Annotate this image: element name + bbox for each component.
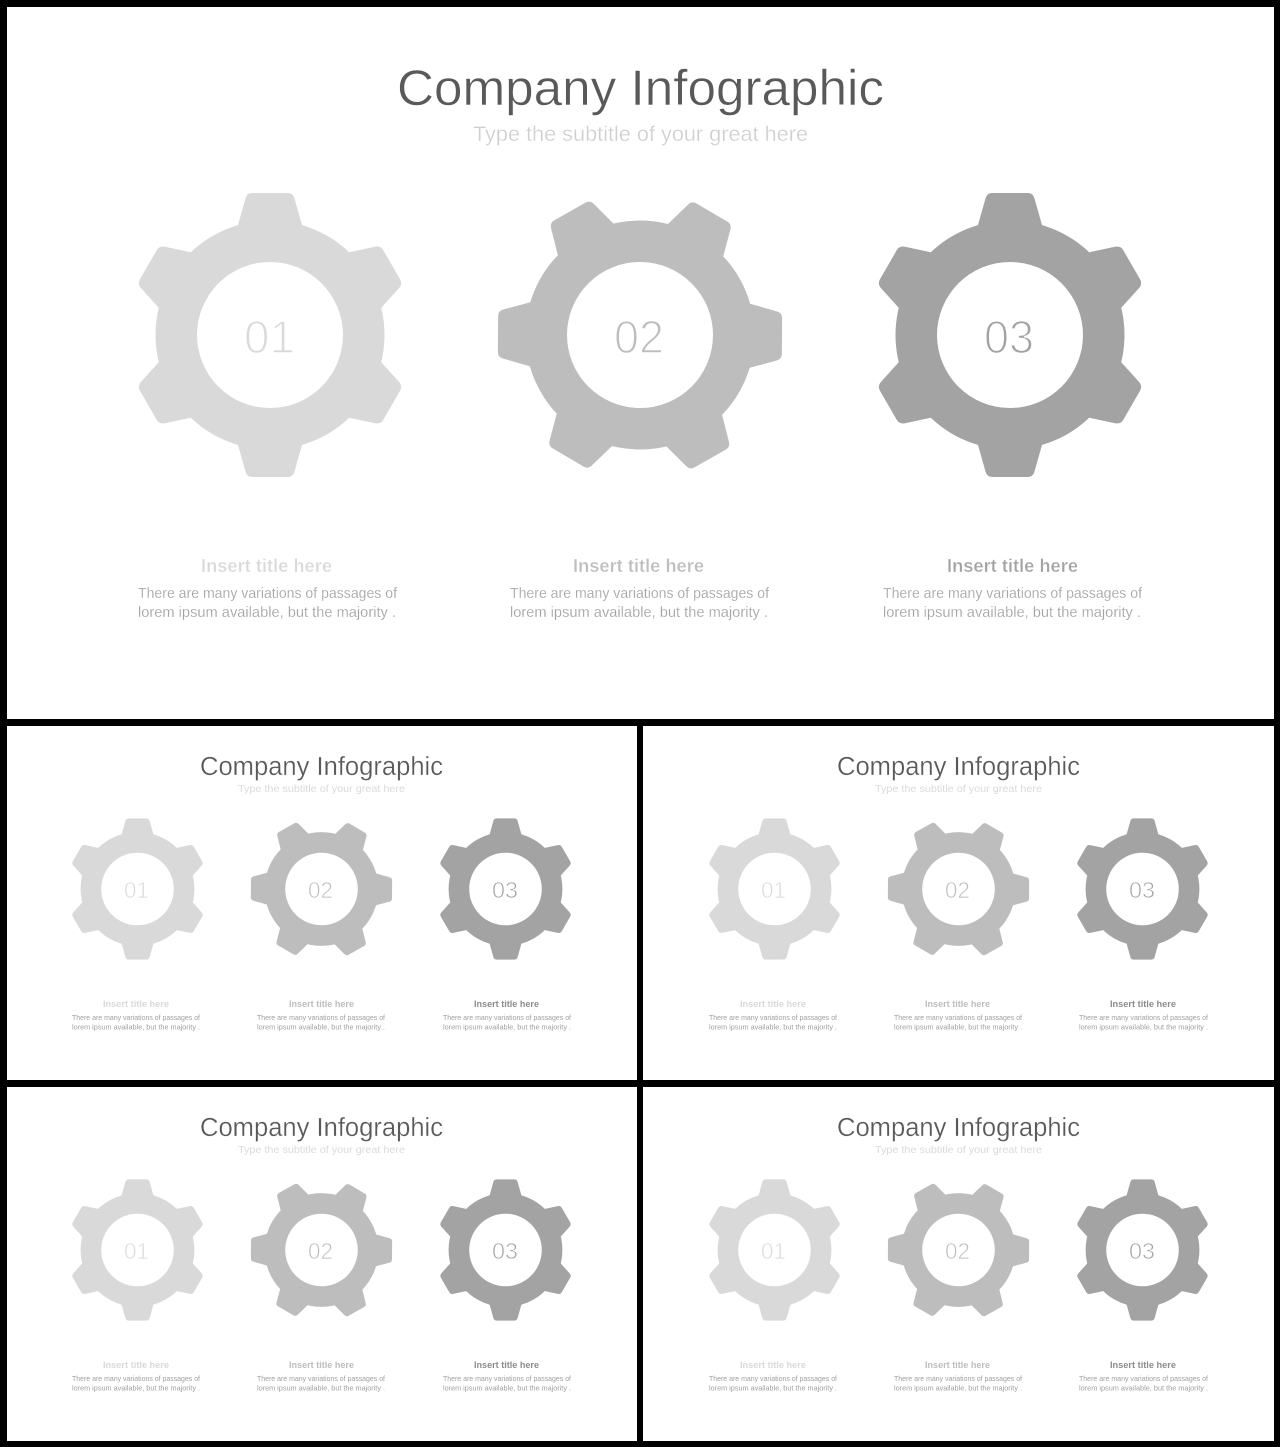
text block: column 2: Insert title here — [925, 999, 990, 1009]
text block: column 3 — [1079, 999, 1208, 1032]
icon: gear 01: 01 — [761, 1238, 786, 1264]
text block: column 1 — [709, 999, 837, 1032]
icon: gear 02: 02 — [945, 1238, 970, 1264]
icon: gear 01: 01 — [244, 311, 295, 363]
text block: column 3 — [883, 556, 1143, 621]
text block: column 3: There are many variations of passages of — [1079, 1374, 1208, 1383]
icon: gear 03 — [1074, 818, 1211, 960]
text block: column 3: lorem ipsum available, but the majority . — [883, 605, 1141, 621]
text block: column 2: There are many variations of passages of — [894, 1013, 1022, 1022]
icon: gear 03: 03 — [1129, 877, 1155, 903]
text block: column 2: Insert title here — [289, 1360, 354, 1370]
text block: column 3 — [1079, 1360, 1208, 1392]
text block: column 1: Insert title here — [201, 556, 332, 576]
icon: gear 02: 02 — [945, 877, 970, 903]
text block: column 1: There are many variations of passages of — [72, 1374, 200, 1383]
text block: column 3: Insert title here — [1110, 999, 1176, 1009]
icon: gear 03: 03 — [984, 311, 1034, 363]
text block: column 1 — [709, 1360, 837, 1392]
panel: small slide bottom left — [7, 1087, 637, 1441]
icon: gear 03 — [437, 818, 574, 960]
text block: column 2: There are many variations of passages of — [894, 1374, 1022, 1383]
text block: column 3: lorem ipsum available, but the majority . — [443, 1022, 571, 1032]
icon: gear 02: 02 — [308, 877, 333, 903]
icon: gear 02: 02 — [308, 1238, 333, 1264]
icon: gear 01 — [706, 1179, 843, 1321]
text block: column 2 — [894, 999, 1022, 1032]
text block: column 1: lorem ipsum available, but the majority . — [138, 605, 396, 621]
text block: column 3: Insert title here — [474, 999, 539, 1009]
title: Company Infographic — [200, 1114, 443, 1142]
panel: large slide — [7, 7, 1274, 719]
text block: column 2: lorem ipsum available, but the majority . — [894, 1384, 1022, 1392]
text block: column 2: lorem ipsum available, but the majority . — [257, 1022, 385, 1032]
text block: column 1: There are many variations of passages of — [72, 1013, 200, 1022]
icon: gear 03: 03 — [492, 1238, 518, 1264]
subtitle: Type the subtitle of your great here — [473, 123, 808, 146]
text block: column 1: lorem ipsum available, but the majority . — [709, 1022, 837, 1032]
title: Company Infographic — [837, 1114, 1080, 1142]
text block: column 1 — [138, 556, 398, 621]
title: Company Infographic — [397, 60, 884, 116]
panel: small slide top right — [643, 726, 1274, 1080]
icon: gear 03: 03 — [1129, 1238, 1155, 1264]
text block: column 1: Insert title here — [740, 1360, 806, 1370]
icon: gear 03 — [871, 193, 1149, 477]
text block: column 2: There are many variations of passages of — [510, 586, 770, 602]
icon: gear 02 — [250, 1180, 393, 1320]
subtitle: Type the subtitle of your great here — [875, 1144, 1042, 1156]
text block: column 2: Insert title here — [573, 556, 704, 576]
text block: column 3: Insert title here — [947, 556, 1078, 576]
text block: column 2: lorem ipsum available, but the majority . — [257, 1384, 385, 1392]
text block: column 2 — [510, 556, 770, 621]
text block: column 1: Insert title here — [740, 999, 806, 1009]
text block: column 1 — [72, 999, 200, 1032]
text block: column 3 — [443, 1360, 571, 1392]
icon: gear 02 — [250, 819, 393, 959]
text block: column 3: lorem ipsum available, but the majority . — [1079, 1022, 1208, 1032]
text block: column 2: There are many variations of passages of — [257, 1374, 385, 1383]
text block: column 3: There are many variations of passages of — [443, 1374, 571, 1383]
panel: small slide top left — [7, 726, 637, 1080]
text block: column 1: Insert title here — [103, 1360, 169, 1370]
icon: gear 01 — [131, 193, 409, 477]
text block: column 3: Insert title here — [474, 1360, 539, 1370]
text block: column 3: lorem ipsum available, but the majority . — [443, 1384, 571, 1392]
text block: column 1: lorem ipsum available, but the majority . — [72, 1022, 200, 1032]
text block: column 1: Insert title here — [103, 999, 169, 1009]
text block: column 2: lorem ipsum available, but the majority . — [894, 1022, 1022, 1032]
text block: column 2: Insert title here — [289, 999, 354, 1009]
text block: column 2 — [257, 1360, 385, 1392]
text block: column 3: There are many variations of passages of — [883, 586, 1143, 602]
text block: column 1: lorem ipsum available, but the majority . — [72, 1384, 200, 1392]
title: Company Infographic — [200, 753, 443, 781]
text block: column 2 — [894, 1360, 1022, 1392]
icon: gear 01 — [706, 818, 843, 960]
text block: column 1: There are many variations of passages of — [138, 586, 398, 602]
panel: small slide bottom right — [643, 1087, 1274, 1441]
icon: gear 03 — [1074, 1179, 1211, 1321]
text block: column 1: There are many variations of passages of — [709, 1013, 837, 1022]
icon: gear 01 — [69, 1179, 206, 1321]
subtitle: Type the subtitle of your great here — [238, 1144, 405, 1156]
text block: column 1: There are many variations of passages of — [709, 1374, 837, 1383]
text block: column 2: lorem ipsum available, but the majority . — [510, 605, 768, 621]
icon: gear 02 — [497, 194, 783, 476]
text block: column 2 — [257, 999, 385, 1032]
icon: gear 01: 01 — [124, 877, 149, 903]
text block: column 3 — [443, 999, 571, 1032]
icon: gear 01: 01 — [761, 877, 786, 903]
text block: column 3: There are many variations of passages of — [1079, 1013, 1208, 1022]
icon: gear 02: 02 — [614, 311, 664, 363]
text block: column 2: There are many variations of passages of — [257, 1013, 385, 1022]
subtitle: Type the subtitle of your great here — [875, 783, 1042, 795]
icon: gear 02 — [887, 1180, 1030, 1320]
text block: column 3: lorem ipsum available, but the majority . — [1079, 1384, 1208, 1392]
icon: gear 01: 01 — [124, 1238, 149, 1264]
icon: gear 03 — [437, 1179, 574, 1321]
text block: column 2: Insert title here — [925, 1360, 990, 1370]
text block: column 3: There are many variations of passages of — [443, 1013, 571, 1022]
text block: column 3: Insert title here — [1110, 1360, 1176, 1370]
text block: column 1: lorem ipsum available, but the majority . — [709, 1384, 837, 1392]
subtitle: Type the subtitle of your great here — [238, 783, 405, 795]
icon: gear 03: 03 — [492, 877, 518, 903]
icon: gear 01 — [69, 818, 206, 960]
text block: column 1 — [72, 1360, 200, 1392]
title: Company Infographic — [837, 753, 1080, 781]
icon: gear 02 — [887, 819, 1030, 959]
